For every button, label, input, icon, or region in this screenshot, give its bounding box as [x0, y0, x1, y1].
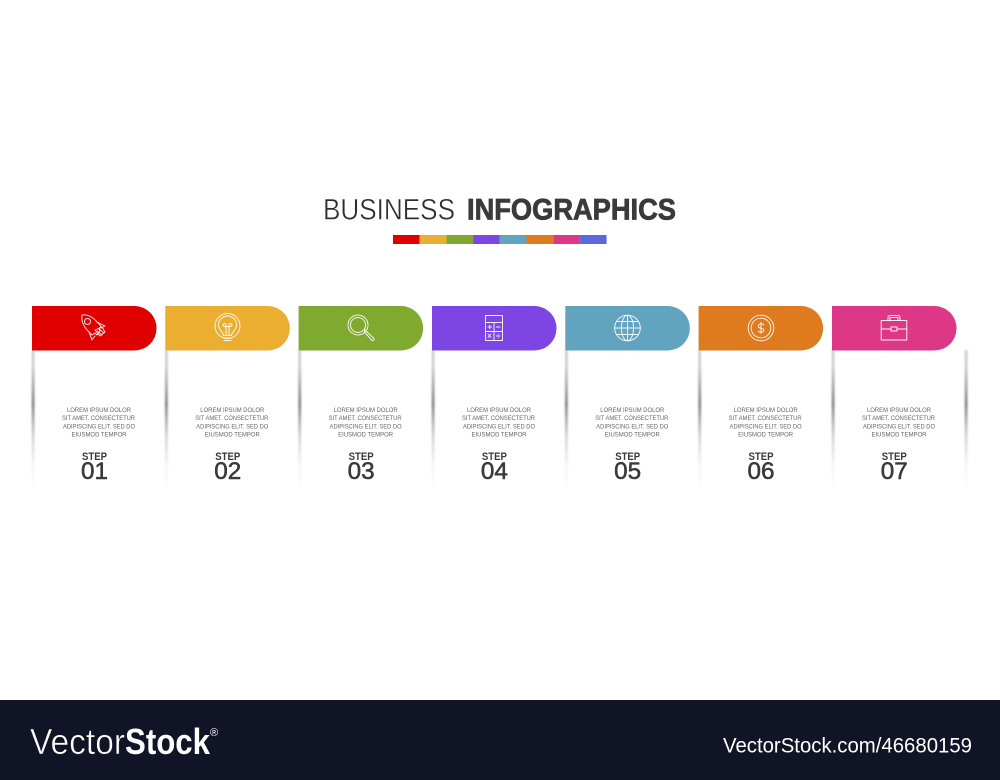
- description: step 07: EIUSMOD TEMPOR: [872, 431, 927, 438]
- description: step 06: ADIPISCING ELIT. SED DO: [730, 423, 802, 430]
- description: step 03: LOREM IPSUM DOLOR: [334, 407, 398, 414]
- description: step 01: ADIPISCING ELIT. SED DO: [63, 423, 135, 430]
- tab: step 02: [165, 306, 290, 350]
- tab: step 07: [832, 306, 957, 350]
- step label: 06: 06: [748, 458, 774, 485]
- footer bar: [0, 700, 1000, 780]
- icon: briefcase: [881, 316, 907, 340]
- step label: 06: STEP: [748, 451, 774, 463]
- description: step 05: LOREM IPSUM DOLOR: [600, 407, 665, 414]
- footer logo: Stock: [125, 721, 211, 762]
- tab: step 03: [299, 306, 423, 350]
- description: step 06: SIT AMET. CONSECTETUR: [729, 415, 802, 422]
- description: step 02: EIUSMOD TEMPOR: [205, 431, 260, 438]
- step label: 01: 01: [81, 458, 108, 485]
- step label: 03: 03: [348, 458, 375, 485]
- description: step 04: EIUSMOD TEMPOR: [472, 431, 527, 438]
- panel: step 01: [32, 306, 157, 492]
- description: step 07: LOREM IPSUM DOLOR: [867, 407, 931, 414]
- panel: step 07: [832, 306, 967, 492]
- step label: 02: STEP: [215, 451, 240, 463]
- step label: 05: 05: [614, 458, 641, 485]
- description: step 04: LOREM IPSUM DOLOR: [467, 407, 531, 414]
- tab: step 04: [432, 306, 557, 350]
- description: step 03: SIT AMET. CONSECTETUR: [329, 415, 402, 422]
- panel: step 03: [299, 306, 423, 492]
- panel: step 04: [432, 306, 557, 492]
- footer image id: VectorStock.com/46680159: [723, 734, 972, 758]
- description: step 07: ADIPISCING ELIT. SED DO: [863, 423, 935, 430]
- icon: light bulb: [215, 314, 240, 340]
- description: step 05: EIUSMOD TEMPOR: [605, 431, 660, 438]
- icon: globe: [615, 315, 640, 341]
- tab: step 05: [565, 306, 690, 350]
- title: INFOGRAPHICS: [467, 193, 676, 226]
- tab: step 06: [699, 306, 823, 350]
- description: step 01: LOREM IPSUM DOLOR: [67, 407, 131, 414]
- step label: 01: STEP: [82, 451, 107, 463]
- description: step 03: EIUSMOD TEMPOR: [338, 431, 393, 438]
- step label: 02: 02: [214, 458, 241, 485]
- panel: step 05: [565, 306, 690, 492]
- description: step 01: EIUSMOD TEMPOR: [72, 431, 127, 438]
- step label: 05: STEP: [615, 451, 640, 463]
- description: step 02: SIT AMET. CONSECTETUR: [195, 415, 269, 422]
- icon: magnifying glass: [348, 315, 374, 341]
- icon: calculator: [486, 316, 502, 340]
- tab: step 01: [32, 306, 157, 350]
- footer logo: ®: [210, 727, 218, 739]
- description: step 02: LOREM IPSUM DOLOR: [200, 407, 265, 414]
- description: step 06: EIUSMOD TEMPOR: [738, 431, 793, 438]
- description: step 04: ADIPISCING ELIT. SED DO: [463, 423, 535, 430]
- description: step 05: ADIPISCING ELIT. SED DO: [596, 423, 668, 430]
- step label: 07: 07: [881, 458, 908, 485]
- step label: 03: STEP: [349, 451, 374, 463]
- description: step 05: SIT AMET. CONSECTETUR: [595, 415, 669, 422]
- description: step 01: SIT AMET. CONSECTETUR: [62, 415, 135, 422]
- step label: 04: 04: [481, 458, 508, 485]
- title: [323, 193, 676, 226]
- footer logo: [30, 721, 218, 762]
- panel: step 02: [165, 306, 290, 492]
- title: BUSINESS: [323, 193, 455, 226]
- panel: step 06: [699, 306, 823, 492]
- description: step 03: ADIPISCING ELIT. SED DO: [330, 423, 402, 430]
- footer logo: Vector: [30, 721, 125, 762]
- step label: 04: STEP: [482, 451, 507, 463]
- icon: rocket: [82, 315, 105, 340]
- description: step 02: ADIPISCING ELIT. SED DO: [196, 423, 268, 430]
- description: step 04: SIT AMET. CONSECTETUR: [462, 415, 535, 422]
- step label: 07: STEP: [882, 451, 907, 463]
- colour bar under title: [393, 235, 607, 244]
- description: step 07: SIT AMET. CONSECTETUR: [862, 415, 935, 422]
- description: step 06: LOREM IPSUM DOLOR: [734, 407, 798, 414]
- icon: dollar coin: [748, 315, 774, 341]
